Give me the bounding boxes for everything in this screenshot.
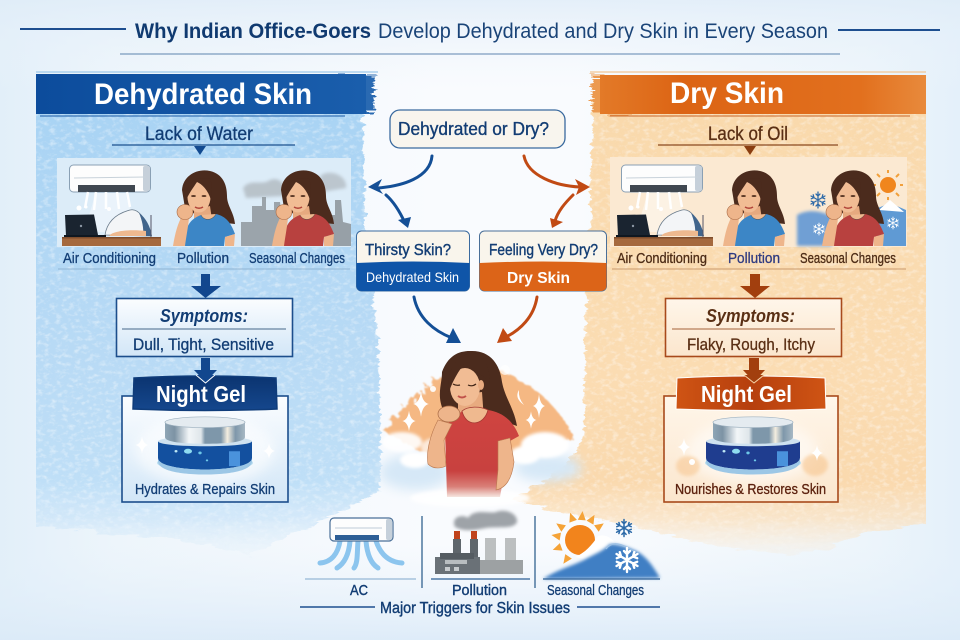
title: Develop Dehydrated and Dry Skin in Every Season: [378, 20, 828, 43]
caption: Hydrates & Repairs Skin: [135, 482, 275, 498]
trigger: pollution: [431, 511, 530, 599]
cause labels: [63, 251, 345, 267]
night gel banner: Night Gel: [701, 381, 792, 407]
cause labels: Air Conditioning: [617, 251, 707, 267]
trigger: seasonal changes: [543, 511, 660, 599]
icon: air conditioner: [320, 518, 402, 568]
image strip: causes: [57, 158, 351, 247]
pale blue mist: [379, 454, 582, 490]
night gel card: [122, 358, 288, 502]
ear: [478, 380, 484, 390]
subheading: [112, 124, 295, 155]
trigger: seasonal changes: Seasonal Changes: [547, 583, 644, 599]
sparkles: [677, 438, 823, 465]
arrow: [740, 274, 770, 298]
cause labels: Pollution: [177, 251, 229, 267]
cause labels: Pollution: [728, 251, 780, 267]
panel background: [510, 100, 932, 555]
clouds: [382, 432, 569, 507]
symptoms box: Symptoms:: [160, 306, 248, 326]
cause labels: Seasonal Changes: [800, 251, 896, 267]
banner heading: Dehydrated Skin: [94, 78, 312, 111]
night gel banner: [676, 375, 826, 410]
icon: polluted city: [241, 173, 351, 246]
cause labels: [617, 251, 896, 267]
decision card: feeling very dry: [480, 231, 606, 291]
triggers caption: Major Triggers for Skin Issues: [380, 600, 570, 617]
panel: dry skin: [510, 72, 932, 555]
night gel banner: Night Gel: [156, 381, 246, 407]
icon: woman in changing weather: [822, 170, 884, 246]
arrow: [191, 274, 221, 298]
arms: [427, 420, 514, 490]
question box: Dehydrated or Dry?: [398, 119, 549, 139]
subheading: Lack of Oil: [708, 124, 788, 145]
image strip: causes: [610, 157, 907, 247]
hair back: [440, 351, 517, 426]
icon: air conditioning scene: [62, 165, 161, 246]
subheading: Lack of Water: [145, 124, 254, 145]
icon: air conditioning scene: [614, 165, 713, 246]
arrows from question: dry: [524, 156, 590, 228]
panel background: [30, 100, 381, 555]
arrow to woman: dehydrated: [414, 297, 461, 343]
icon: factory: [435, 511, 523, 574]
red shirt: [445, 410, 519, 497]
title: [20, 20, 940, 54]
triggers row: [300, 511, 660, 617]
decision card: thirsty skin: [356, 231, 470, 291]
arrow: [194, 358, 217, 382]
trigger: pollution: Pollution: [452, 582, 507, 599]
sparkles: [402, 365, 545, 431]
face: [450, 368, 480, 406]
icon: gel jar: [705, 417, 801, 474]
icon: woman coughing: [723, 170, 785, 246]
icon: gel jar: [157, 417, 253, 474]
fist: [438, 406, 460, 422]
eyes: [453, 384, 476, 386]
night gel card: [664, 358, 838, 502]
sparkles: [135, 436, 275, 459]
panel: dehydrated skin: [30, 72, 381, 555]
icon: sun and snowy hill: [543, 511, 660, 579]
night gel banner: [133, 375, 277, 410]
trigger: ac: AC: [350, 582, 368, 599]
hair top: [449, 353, 490, 392]
symptoms box: [666, 298, 842, 356]
trigger: ac: [305, 518, 416, 599]
title: Why Indian Office-Goers: [135, 20, 371, 43]
illustration: woman with dry skin: [379, 351, 582, 507]
decision card: thirsty skin: Dehydrated Skin: [366, 269, 459, 285]
banner heading: [590, 72, 926, 116]
neckline: [462, 407, 488, 423]
icon: winter and summer weather: [797, 170, 906, 246]
orange splash: [384, 370, 574, 460]
subheading: [658, 124, 838, 155]
symptoms box: Dull, Tight, Sensitive: [133, 336, 274, 354]
arrow to woman: dry: [497, 297, 537, 343]
icon: woman coughing: [173, 170, 235, 246]
lips: [458, 396, 466, 398]
decision card: thirsty skin: Thirsty Skin?: [365, 242, 451, 259]
cause labels: Seasonal Changes: [249, 251, 345, 267]
decision card: feeling very dry: Dry Skin: [507, 270, 570, 287]
decision card: feeling very dry: Feeling Very Dry?: [489, 242, 598, 259]
arrows from question: dehydrated: [368, 156, 432, 228]
banner heading: [36, 72, 378, 116]
arrow: [743, 358, 765, 382]
question box: [390, 110, 565, 148]
symptoms box: Flaky, Rough, Itchy: [687, 336, 816, 354]
neck: [458, 392, 484, 420]
icon: woman in smog: [272, 170, 334, 246]
symptoms box: Symptoms:: [706, 306, 795, 326]
cause labels: Air Conditioning: [63, 251, 156, 267]
symptoms box: [116, 298, 292, 356]
banner heading: Dry Skin: [670, 77, 784, 110]
caption: Nourishes & Restores Skin: [675, 482, 826, 498]
